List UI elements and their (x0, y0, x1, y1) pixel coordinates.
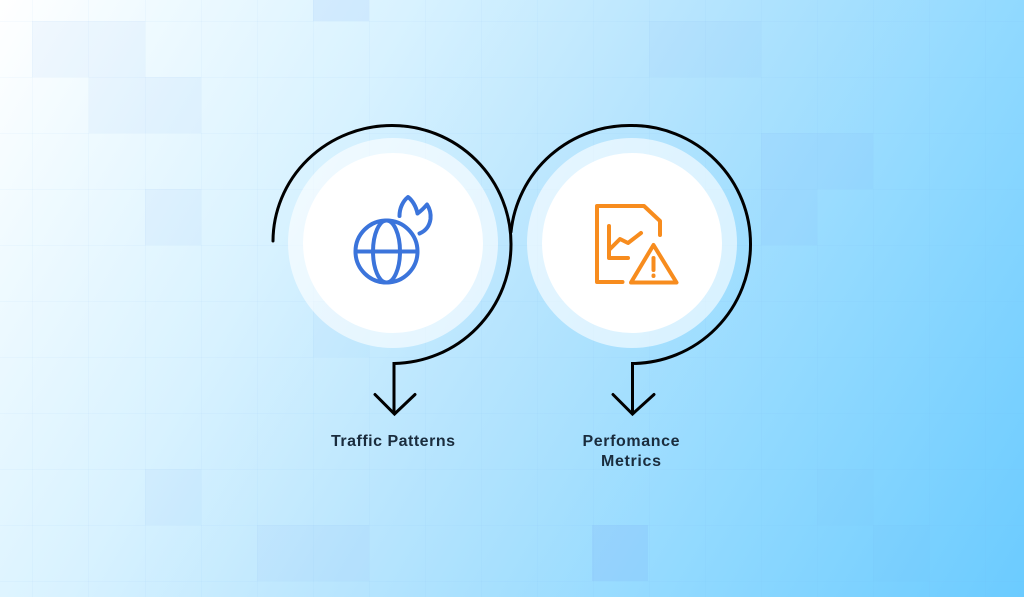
arrow: left looping arrow (273, 126, 511, 414)
label: performance metrics: Perfomance (582, 433, 680, 450)
arrow: right looping arrow (511, 125, 751, 414)
panel: traffic patterns circle (288, 138, 498, 348)
label: traffic patterns: Traffic Patterns (331, 433, 455, 450)
icon: globe with flame (356, 197, 431, 282)
label: performance metrics (582, 433, 680, 470)
panel: performance metrics circle (527, 138, 737, 348)
icon: document chart with warning (597, 206, 676, 282)
label: performance metrics: Metrics (601, 453, 661, 470)
